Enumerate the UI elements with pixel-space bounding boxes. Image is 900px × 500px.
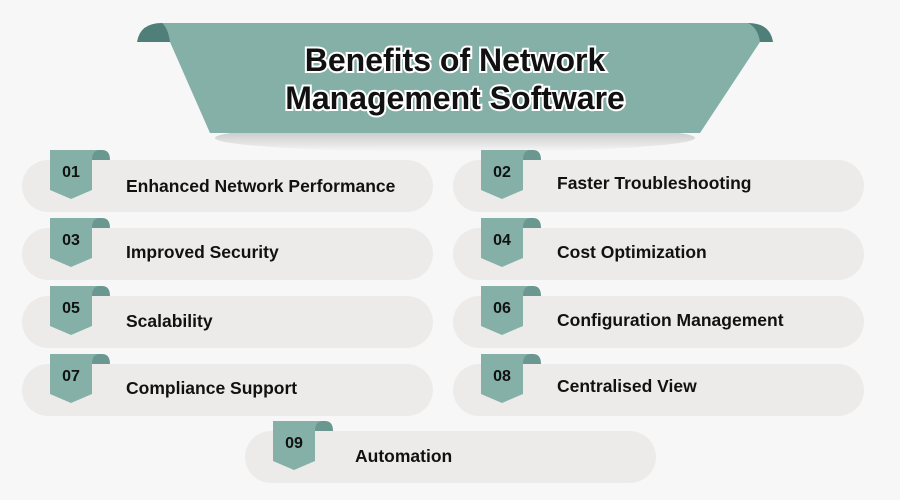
item 03 (22, 218, 433, 280)
item 06 (453, 286, 864, 348)
item 09: Automation (355, 446, 452, 466)
item 04: Cost Optimization (557, 242, 707, 262)
item 07: 07 (62, 368, 80, 385)
item 02: Faster Troubleshooting (557, 173, 751, 193)
item 01 (22, 150, 433, 212)
item 08 (453, 354, 864, 416)
item 07 (22, 354, 433, 416)
title banner (137, 23, 773, 148)
item 08: 08 (493, 368, 511, 385)
item 01: Enhanced Network Performance (126, 176, 395, 196)
item 06: 06 (493, 300, 511, 317)
item 02 (453, 150, 864, 212)
item 03: 03 (62, 232, 80, 249)
item 09: 09 (285, 435, 303, 452)
item 05: 05 (62, 300, 80, 317)
item 03: Improved Security (126, 242, 279, 262)
item 01: 01 (62, 164, 80, 181)
item 08: Centralised View (557, 376, 697, 396)
item 06: Configuration Management (557, 310, 784, 330)
item 07: Compliance Support (126, 378, 297, 398)
item 02: 02 (493, 164, 511, 181)
item 05 (22, 286, 433, 348)
title banner: Management Software (285, 80, 625, 116)
item 05: Scalability (126, 311, 213, 331)
item 04 (453, 218, 864, 280)
item 04: 04 (493, 232, 511, 249)
item 09 (245, 421, 656, 483)
title banner: Benefits of Network (305, 42, 605, 78)
